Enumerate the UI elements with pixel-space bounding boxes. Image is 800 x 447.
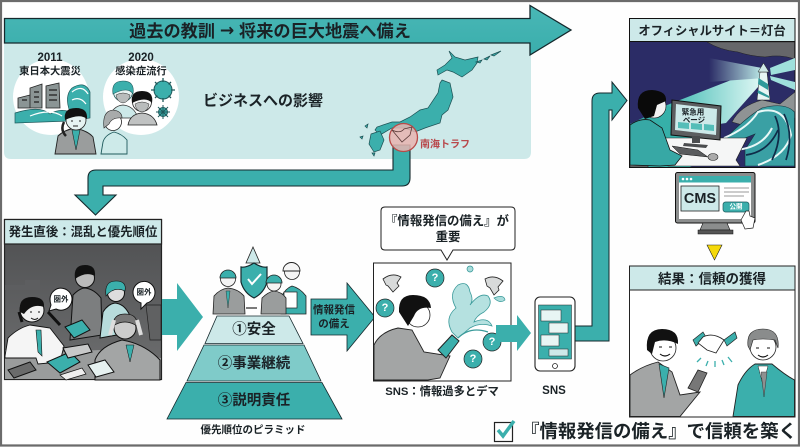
conclusion banner: 『情報発信の備え』で信頼を築く: [521, 420, 797, 442]
arrow: chaos to priorities: [162, 283, 203, 351]
heading: result: [630, 266, 795, 290]
event: 2011 earthquake: [13, 52, 96, 154]
tier 3: accountability: ③説明責任: [218, 391, 290, 409]
heading: immediate aftermath: [4, 220, 162, 244]
callout: information readiness is important: 重要: [436, 229, 460, 244]
panel: result, trust earned: [630, 266, 795, 417]
arrow: information readiness: 情報発信: [313, 303, 355, 316]
labels: question marks: ?: [432, 272, 439, 284]
illustration: swirling rumours: [449, 284, 492, 338]
speech bubble: out of range right: 圏外: [136, 286, 152, 296]
illustration: right man: [733, 329, 794, 416]
callout: information readiness is important: [381, 207, 515, 260]
arrow: information readiness: [311, 283, 375, 351]
icon: CMS monitor: [676, 172, 755, 234]
icon: smartphone: [535, 297, 575, 371]
label: emergency page: ページ: [683, 116, 706, 124]
heading: official site: [630, 18, 795, 42]
speech bubble: out of range left: [49, 288, 72, 311]
map: Japan: [360, 51, 501, 156]
icon: shield with check and staff: [213, 247, 306, 314]
arrow: SNS post to phone: [496, 315, 531, 351]
label: CMS: CMS: [684, 191, 716, 207]
heading: result: 結果：信頼の獲得: [658, 270, 766, 286]
scene: office in chaos: [5, 265, 161, 380]
button: publish: 公開: [730, 202, 743, 210]
arrow: SNS route to official site: [575, 82, 627, 341]
icons: question bubbles: [376, 269, 501, 368]
label: emergency page: [682, 106, 706, 124]
arrow: impact to immediate aftermath: [75, 145, 410, 215]
event: 2011 earthquake: 東日本大震災: [19, 64, 82, 78]
illustration: left man with phone: [630, 329, 707, 416]
scene: lighthouse in storm: [630, 42, 795, 167]
icons: rumour tornadoes: [383, 275, 503, 295]
heading: immediate aftermath: 発生直後：混乱と優先順位: [9, 224, 158, 239]
callout: information readiness is important: 『情報発信の備え』が: [385, 213, 510, 228]
event: 2011 earthquake: 2011: [38, 52, 63, 64]
illustration: person with smartphone: [374, 328, 450, 380]
panel: official site is the lighthouse: [630, 18, 795, 168]
marker: Nankai Trough: 南海トラフ: [420, 138, 470, 150]
event: 2020 pandemic: 2020: [128, 52, 154, 64]
marker: Nankai Trough: [390, 124, 470, 152]
heading: main title: 過去の教訓 → 将来の巨大地震へ備え: [129, 21, 411, 41]
caption: SNS: SNS: [542, 385, 566, 397]
label: emergency page: 緊急用: [682, 106, 704, 116]
arrow: information readiness: の備え: [318, 317, 350, 330]
tier 2: business continuity: [187, 345, 321, 381]
heading: official site: オフィシャルサイト＝灯台: [638, 23, 786, 38]
labels: question marks: [382, 272, 496, 365]
arrow: past lessons to future earthquakes: [4, 6, 571, 55]
panel: business impact background: [4, 43, 531, 159]
labels: question marks: ?: [470, 353, 477, 365]
icon: pointing hand: [741, 211, 755, 229]
chart: priority pyramid: [167, 316, 342, 419]
tier 1: safety: ①安全: [232, 320, 276, 338]
labels: question marks: ?: [489, 336, 496, 348]
caption: priority pyramid: 優先順位のピラミッド: [200, 423, 306, 436]
panel: immediately after the disaster: [4, 220, 162, 380]
panel: SNS information overload: [374, 263, 511, 381]
text: business impact: ビジネスへの影響: [203, 92, 323, 110]
arrow: yellow down triangle: [707, 245, 722, 260]
caption: SNS overload: SNS：情報過多とデマ: [385, 384, 499, 398]
speech bubble: out of range left: 圏外: [54, 294, 69, 304]
event: 2020 pandemic: 感染症流行: [115, 64, 167, 78]
tier 2: business continuity: ②事業継続: [218, 354, 291, 372]
illustration: handshake: [693, 332, 737, 367]
icon: checkbox: [494, 421, 514, 442]
labels: question marks: ?: [382, 302, 389, 314]
event: 2020 pandemic: [101, 52, 179, 154]
speech bubble: out of range right: [133, 281, 155, 309]
tier 1: safety: [205, 316, 303, 344]
tier 3: accountability: [167, 382, 342, 419]
